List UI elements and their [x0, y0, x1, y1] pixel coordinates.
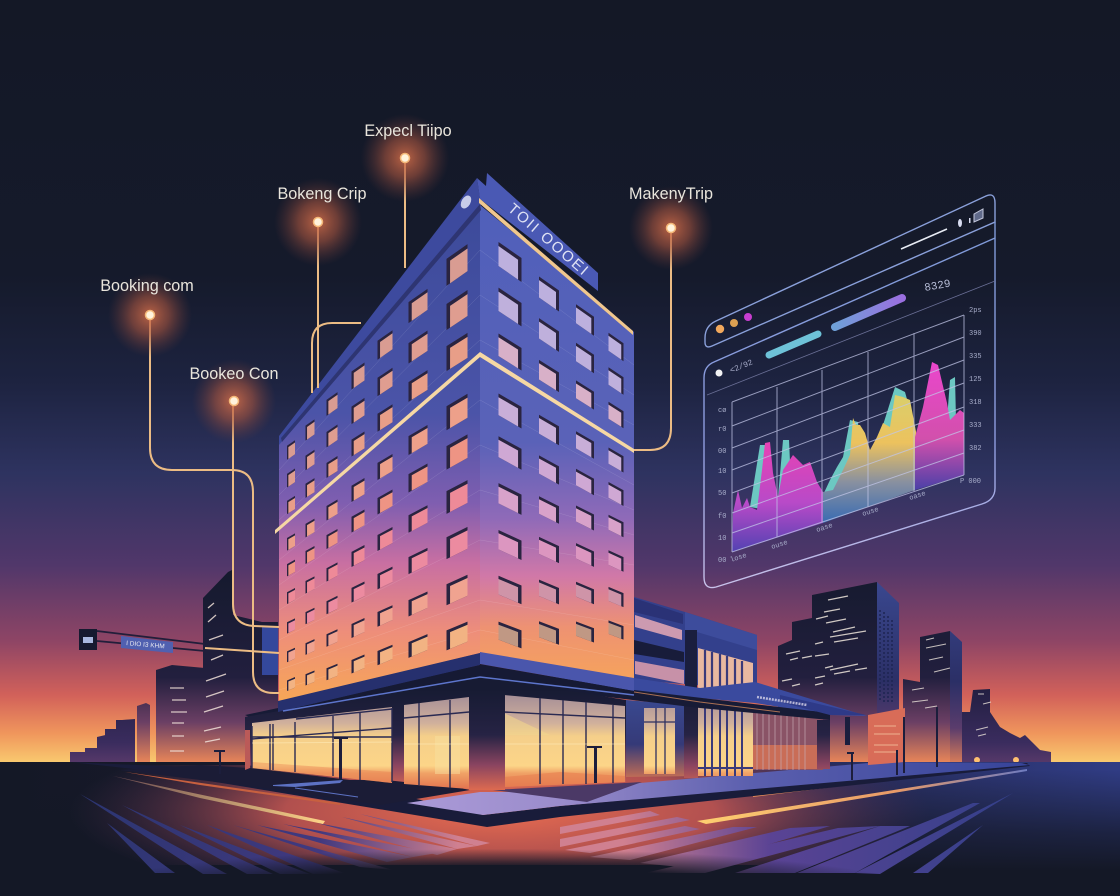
left facade windows: [287, 244, 468, 691]
left axis labels: 00: [718, 448, 726, 456]
yellow series: [823, 395, 917, 523]
annex building: [626, 597, 905, 778]
node glow halos: [108, 114, 713, 443]
right axis labels: 390: [969, 330, 982, 338]
parapet shadow: [281, 204, 481, 442]
panel value: 8329: [924, 279, 952, 295]
rooftop logo: [459, 194, 473, 210]
channel label: Bookeo Con: Bookeo Con: [189, 365, 279, 383]
teal pill: [769, 334, 818, 355]
traffic signal: [79, 629, 205, 653]
status dot: [716, 370, 722, 376]
canopy: [245, 665, 867, 722]
left axis labels: cø: [718, 407, 726, 415]
right axis labels: P 000: [960, 478, 981, 486]
sidewalk and curb: [70, 762, 1030, 827]
upper gold band: [479, 198, 633, 335]
right axis labels: 318: [969, 399, 982, 407]
connector wires: [150, 158, 671, 693]
storefront glass panes: [252, 695, 625, 789]
bottom axis labels: lose: [729, 552, 748, 565]
corner pillar: [469, 682, 505, 790]
right axis labels: 333: [969, 422, 982, 430]
right facade windows: [498, 242, 624, 648]
road lane markings: [113, 764, 1027, 824]
magenta series: [915, 362, 964, 490]
status label: <2/92: [729, 358, 755, 376]
right axis labels: 335: [969, 353, 982, 361]
left axis labels: 00: [718, 557, 726, 565]
lower road fade: [0, 846, 1120, 896]
violet pill: [835, 298, 902, 327]
right axis labels: 2ps: [969, 307, 982, 315]
crosswalk stripes: [80, 793, 1013, 874]
channel label: MakenyTrip: MakenyTrip: [629, 185, 713, 203]
left axis labels: 10: [718, 535, 726, 543]
area chart: [732, 315, 964, 552]
left axis labels: f0: [718, 513, 726, 521]
bottom axis labels: [729, 490, 927, 565]
bottom axis labels: oase: [815, 522, 834, 535]
rooftop sign text: TOII OOOEI: [504, 200, 593, 280]
channel label: Expecl Tiipo: Expecl Tiipo: [364, 122, 452, 140]
left skyline: [70, 570, 278, 762]
rooftop sign panel: [477, 173, 598, 291]
left axis labels: r0: [718, 426, 726, 434]
bottom axis labels: oase: [908, 490, 927, 503]
panel title bar: [705, 195, 995, 347]
channel label: Booking com: Booking com: [100, 277, 194, 295]
teal spikes: [750, 377, 964, 522]
facade siding lines: [279, 250, 634, 690]
left axis labels: 10: [718, 468, 726, 476]
bottom axis labels: ouse: [861, 506, 880, 519]
roof parapet: [279, 178, 481, 445]
right skyline: [778, 582, 1051, 763]
storefront base: [245, 676, 626, 790]
panel body outline: [704, 222, 995, 588]
node dots: [146, 154, 676, 406]
title bar controls: [901, 209, 983, 249]
right axis labels: 382: [969, 445, 982, 453]
bottom axis labels: ouse: [770, 539, 789, 552]
traffic signal: I DIO I3 KHM: [126, 640, 165, 650]
channel label: Bokeng Crip: Bokeng Crip: [277, 185, 367, 203]
street lamps: [214, 707, 938, 783]
canopy fascia: [278, 652, 634, 712]
chart grid: [732, 315, 964, 552]
separator: [707, 281, 995, 395]
road surface: [0, 762, 1120, 896]
left axis labels: [718, 407, 726, 565]
right axis labels: 125: [969, 376, 982, 384]
dashboard panel: [704, 195, 995, 588]
left axis labels: 50: [718, 490, 726, 498]
pink series: [732, 442, 823, 552]
mid gold band: [275, 352, 634, 534]
window dots: [716, 313, 752, 333]
right axis labels: [960, 307, 982, 486]
right facade: [480, 205, 634, 680]
left facade: [279, 205, 480, 702]
hotel tower: [275, 173, 634, 702]
